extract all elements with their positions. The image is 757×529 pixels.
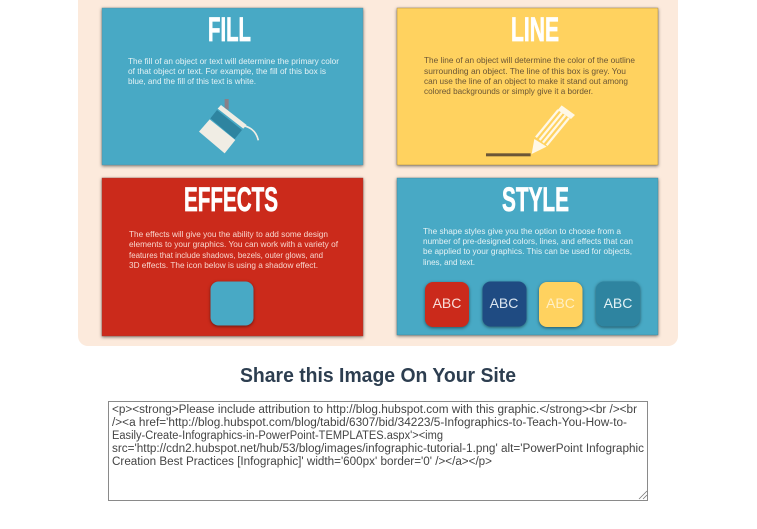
panel: line card: [397, 8, 658, 165]
text: line description: surrounding an object. The line of this box is grey. You: [424, 66, 626, 76]
button: yellow abc: [539, 282, 582, 327]
heading: share this image: Share this Image On Your Site: [240, 365, 516, 387]
panel: effects card: [102, 178, 363, 336]
text: style description: be applied to your graphics. This can be used for objects,: [423, 246, 632, 256]
button: yellow abc: ABC: [546, 295, 575, 311]
icon: resize grip: [639, 491, 647, 499]
embed code text box: [108, 402, 648, 500]
panel: fill card: [102, 8, 363, 165]
heading: style: STYLE: [502, 181, 569, 219]
text: effects description: The effects will give you the ability to add some design: [129, 229, 328, 239]
icon: pencil drawing a line: [486, 105, 575, 156]
text: line description: colored backgrounds or simply give it a border.: [424, 86, 593, 96]
text: embed code: <p><strong>Please include attribution to http://blog.hubspot.com with this graphic.</strong><br /><br: [112, 404, 637, 416]
text: line description: The line of an object will determine the color of the outline: [424, 55, 635, 65]
button: teal abc: ABC: [604, 295, 632, 311]
text: embed code: [112, 404, 644, 468]
text: embed code: Creation Best Practices [Infographic]' width='600px' border='0' /></a></p>: [112, 456, 492, 468]
icon: shadow square: [210, 282, 254, 326]
text: effects description: 3D effects. The icon below is using a shadow effect.: [129, 260, 318, 270]
text: line description: [424, 55, 635, 96]
text: style description: [423, 226, 633, 267]
text: embed code: Easily-Create-Infographics-in-PowerPoint-TEMPLATES.aspx'><img: [112, 430, 443, 442]
text: embed code: src='http://cdn2.hubspot.net/hub/53/blog/images/infographic-tutorial-1.png' alt='PowerPoint Infographic: [112, 443, 644, 455]
text: fill description: The fill of an object or text will determine the primary color: [128, 56, 339, 66]
text: effects description: features that include shadows, bezels, outer glows, and: [129, 250, 323, 260]
button: teal abc: [596, 282, 640, 326]
text: style description: The shape styles give you the option to choose from a: [423, 226, 621, 236]
icon: paint bucket: [199, 99, 258, 153]
panel: peach background: [78, 0, 678, 346]
button: red abc: ABC: [433, 295, 461, 311]
text: fill description: of that object or text. For example, the fill of this box is: [128, 66, 326, 76]
text: style description: number of pre-designed colors, lines, and effects that can: [423, 236, 633, 246]
text: fill description: [128, 56, 339, 86]
text: embed code: /><a href='http://blog.hubspot.com/blog/tabid/6307/bid/34223/5-Infographics-to-Teach-You-How-to-: [112, 417, 627, 429]
text: effects description: elements to your graphics. You can work with a variety of: [129, 239, 339, 249]
heading: fill: FILL: [208, 11, 251, 49]
text: fill description: blue, and the fill of this text is white.: [128, 76, 256, 86]
button: red abc: [425, 282, 469, 327]
panel: style card: [397, 178, 658, 335]
text: line description: can use the line of an object to make it stand out among: [424, 76, 628, 86]
button: navy abc: ABC: [490, 295, 518, 311]
text: effects description: [129, 229, 339, 270]
heading: line: LINE: [511, 11, 559, 49]
text: style description: lines, and text.: [423, 257, 475, 267]
button: navy abc: [482, 282, 526, 326]
heading: effects: EFFECTS: [184, 181, 278, 219]
